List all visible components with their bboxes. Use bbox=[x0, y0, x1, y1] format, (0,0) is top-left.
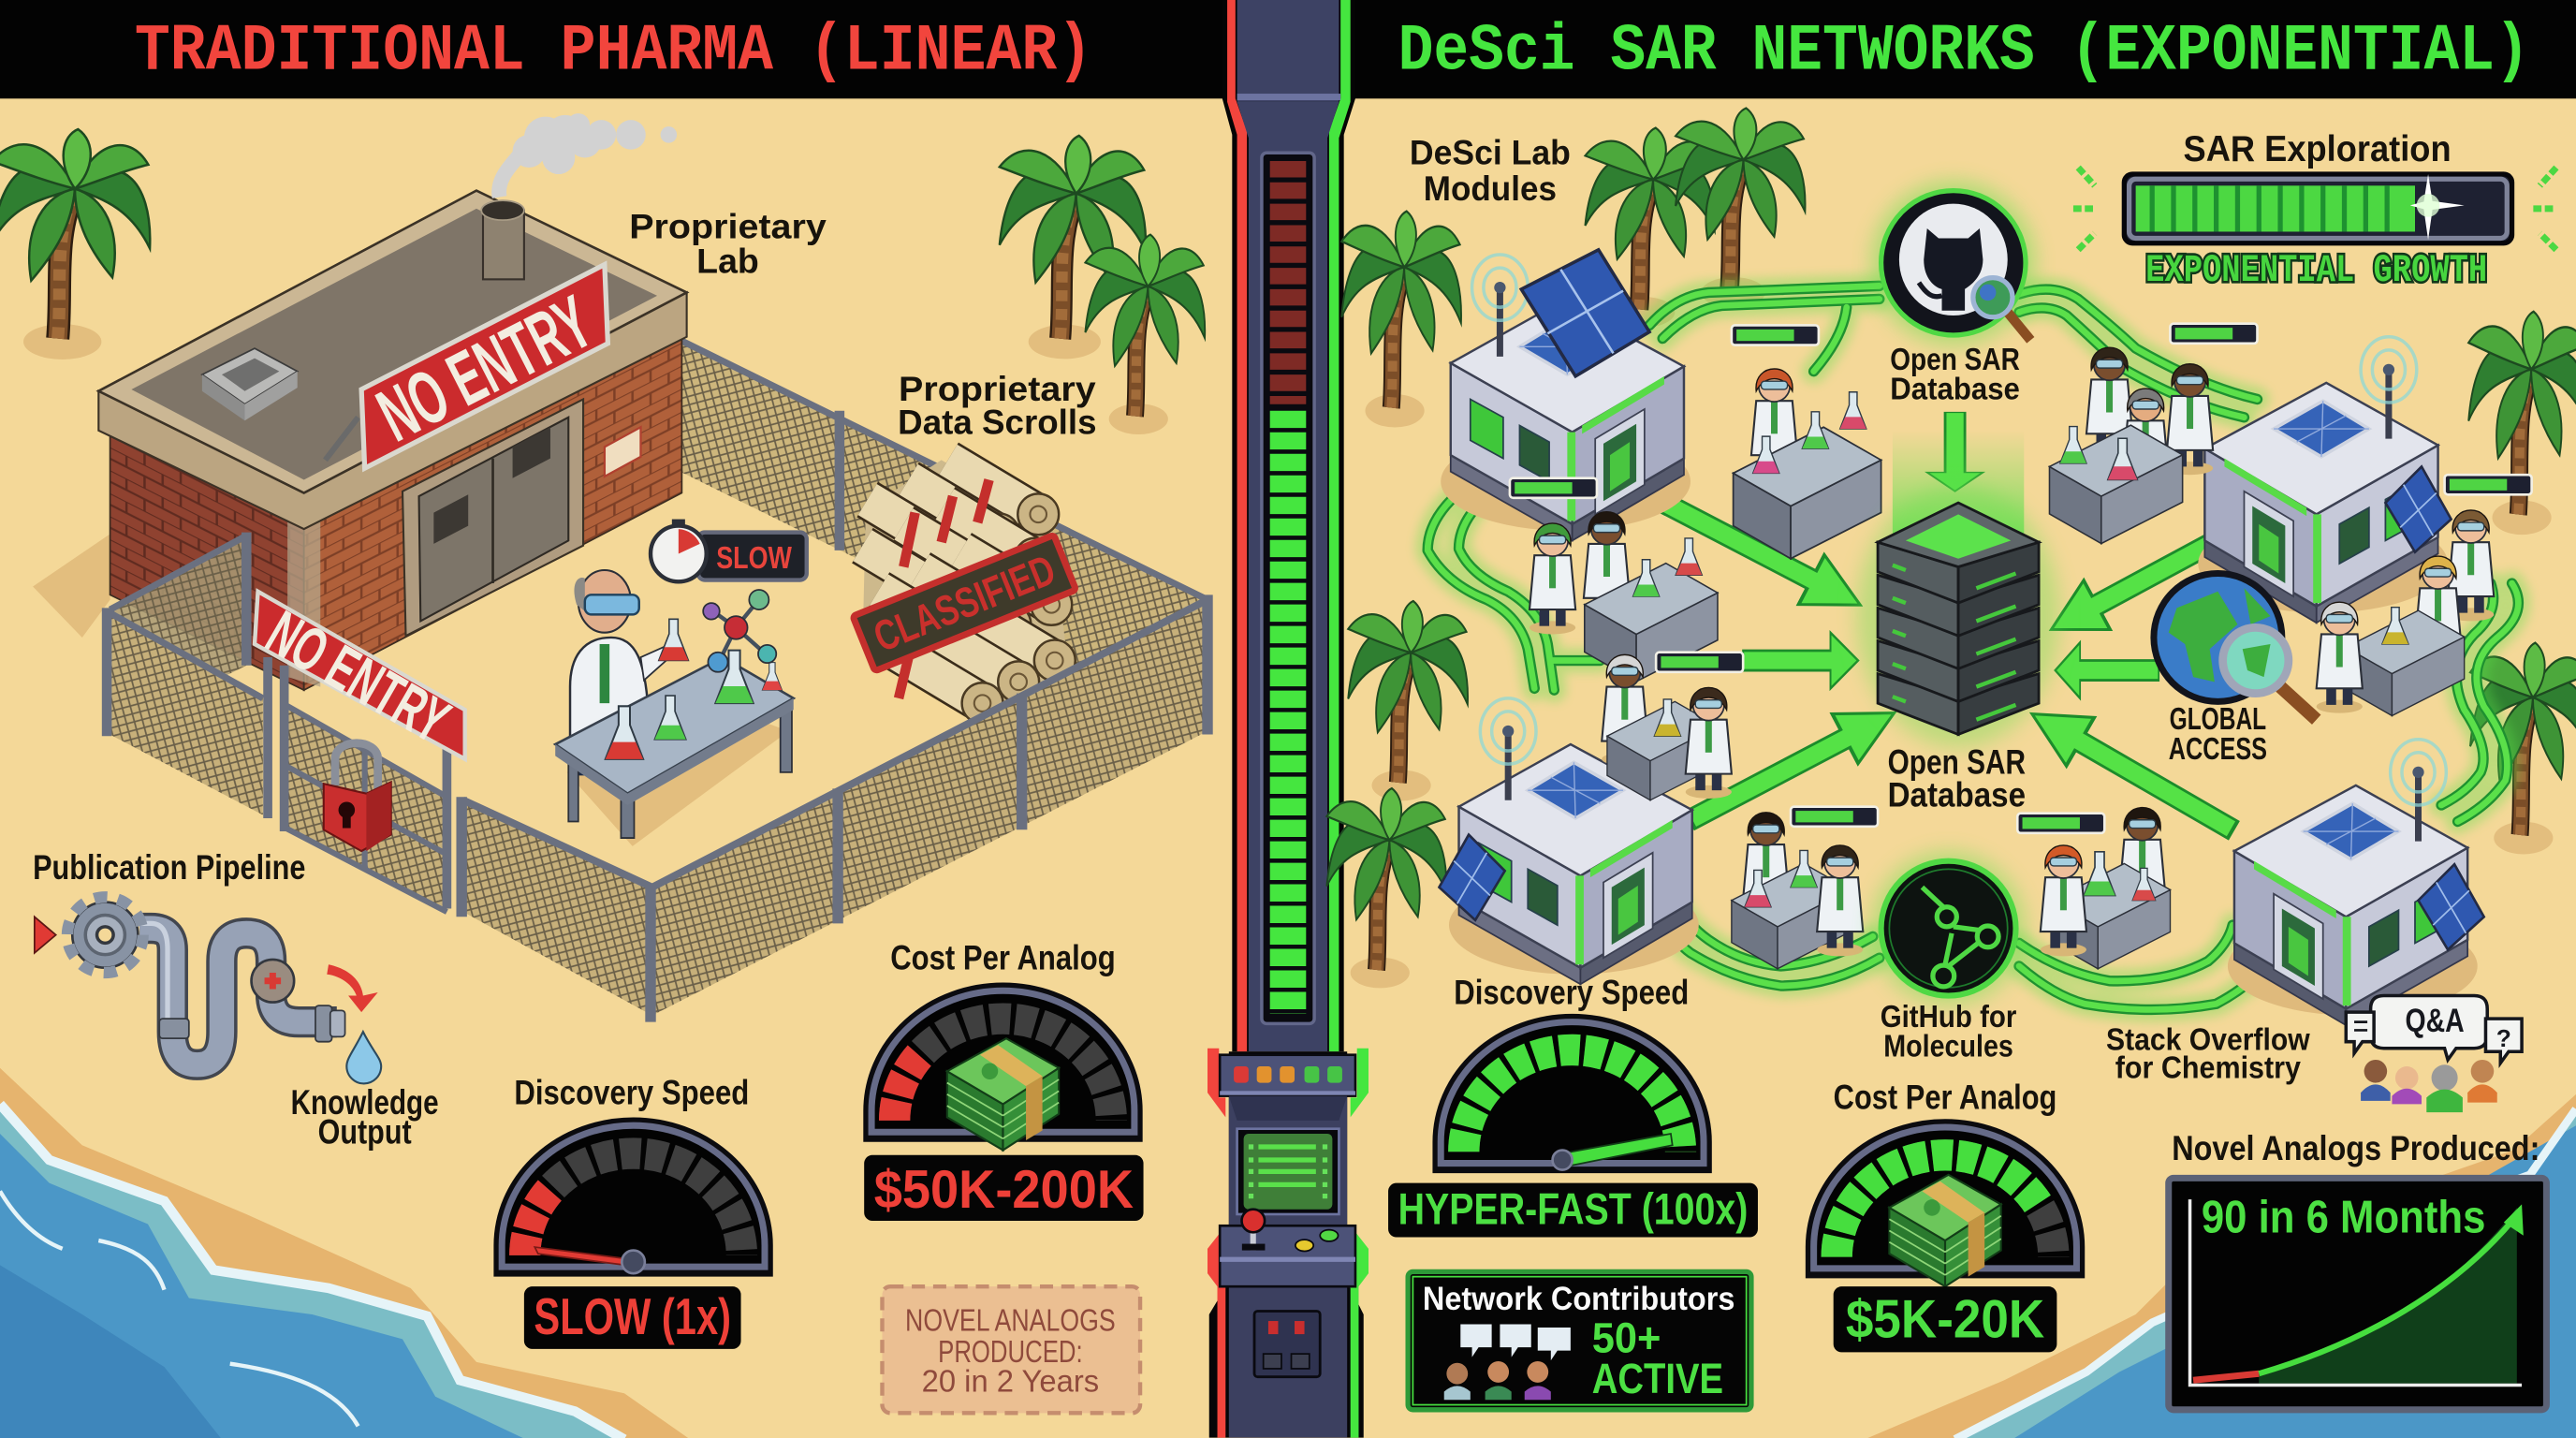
axes bbox=[2190, 1199, 2522, 1385]
stat box: novel analogs left bbox=[882, 1286, 1140, 1413]
pipeline bbox=[35, 897, 345, 1064]
wall notice bbox=[605, 427, 640, 477]
scientist group: lower left bbox=[1602, 654, 1732, 800]
scientist bbox=[570, 570, 674, 775]
chat bubbles bbox=[1460, 1325, 1571, 1360]
label: proprietary lab: Proprietary bbox=[629, 207, 827, 245]
panel: network contributors: ACTIVE bbox=[1592, 1355, 1723, 1402]
label: stack overflow for chemistry: for Chemistry bbox=[2115, 1050, 2301, 1085]
ac unit bbox=[202, 348, 298, 420]
badge: slow 1x: SLOW (1x) bbox=[534, 1288, 731, 1345]
icon: water drop bbox=[346, 1032, 381, 1083]
network traces bbox=[1427, 286, 2518, 1009]
label: proprietary lab bbox=[629, 207, 827, 280]
led meter bbox=[1262, 153, 1314, 1023]
palm trees: right scene bbox=[1326, 108, 2576, 988]
rays bbox=[2073, 168, 2556, 250]
label: exponential growth: EXPONENTIAL GROWTH bbox=[2145, 248, 2487, 293]
label: open sar database top: Database bbox=[1890, 372, 2020, 406]
scientist group: bottom left bbox=[1732, 813, 1863, 969]
classified stamp: CLASSIFIED bbox=[867, 546, 1061, 661]
classified stamp bbox=[853, 535, 1076, 671]
scientist group: left middle bbox=[1530, 512, 1718, 682]
magnifier bbox=[1973, 278, 2030, 340]
label: open sar database bottom: Open SAR bbox=[1888, 743, 2026, 782]
label: desci lab modules bbox=[1410, 134, 1571, 208]
label: proprietary data scrolls: Data Scrolls bbox=[898, 403, 1097, 441]
label: knowledge output bbox=[291, 1083, 439, 1151]
label: sar exploration: SAR Exploration bbox=[2184, 129, 2452, 169]
gate no entry sign: NO ENTRY bbox=[256, 598, 461, 756]
roof no entry sign bbox=[326, 265, 607, 468]
scrolls pile bbox=[853, 460, 1076, 724]
q&a speech bubbles bbox=[2346, 996, 2522, 1112]
arrow: github to database bbox=[1927, 413, 1983, 492]
label: discovery speed left: Discovery Speed bbox=[514, 1073, 749, 1111]
slow timer badge: SLOW bbox=[716, 541, 792, 576]
lights bbox=[1234, 1066, 1342, 1083]
stat box: novel analogs left: NOVEL ANALOGS bbox=[905, 1304, 1116, 1339]
center column with led meter bbox=[1222, 0, 1355, 1051]
label: proprietary lab: Lab bbox=[696, 242, 759, 280]
slow timer badge bbox=[651, 520, 807, 581]
stat box: novel analogs left: 20 in 2 Years bbox=[922, 1365, 1099, 1400]
lab table with scientist bbox=[555, 570, 794, 846]
chart: 90 in 6 months bbox=[2169, 1178, 2546, 1410]
fence: front panels bbox=[461, 594, 1208, 1022]
sar exploration progress bar bbox=[2073, 168, 2556, 250]
smoke bbox=[499, 113, 677, 198]
q&a speech bubbles: ? bbox=[2496, 1024, 2511, 1052]
area under curve bbox=[2259, 1208, 2517, 1384]
linear segment bbox=[2193, 1373, 2259, 1380]
scientist group: right bbox=[2317, 510, 2494, 715]
label: stack overflow for chemistry: Stack Overflow bbox=[2106, 1022, 2310, 1057]
title: traditional pharma: TRADITIONAL PHARMA (LINEAR) bbox=[135, 16, 1092, 90]
palm trees: left scene bbox=[0, 129, 1205, 434]
badge: hyper-fast: HYPER-FAST (100x) bbox=[1398, 1184, 1748, 1234]
sparkle bbox=[2410, 174, 2465, 240]
label: knowledge output: Knowledge bbox=[291, 1083, 439, 1122]
gauge: cost per analog right bbox=[1810, 1123, 2080, 1286]
progress mini bars bbox=[1510, 324, 2532, 833]
label: publication pipeline: Publication Pipeline bbox=[33, 848, 305, 887]
icon: github octocat circle bbox=[1871, 181, 2036, 345]
coin door bbox=[1254, 1312, 1320, 1377]
building: proprietary lab bbox=[33, 113, 687, 690]
ocean: bottom left bbox=[0, 1068, 690, 1438]
locked gate bbox=[255, 592, 465, 912]
label: github for molecules: GitHub for bbox=[1881, 1000, 2016, 1034]
brick walls bbox=[110, 431, 304, 690]
chimney bbox=[481, 200, 524, 279]
fence: back panel bbox=[677, 339, 1208, 731]
label: cost per analog right: Cost Per Analog bbox=[1834, 1078, 2056, 1117]
label: open sar database bottom bbox=[1888, 743, 2026, 814]
label: stack overflow for chemistry bbox=[2106, 1022, 2310, 1085]
gate no entry sign bbox=[255, 592, 465, 759]
gauge: cost per analog left bbox=[869, 988, 1137, 1151]
q&a speech bubbles: Q&A bbox=[2405, 1003, 2465, 1039]
label: proprietary data scrolls: Proprietary bbox=[899, 370, 1096, 408]
badge: 5k-20k: $5K-20K bbox=[1846, 1290, 2044, 1350]
icon: red flow arrow bbox=[327, 964, 378, 1012]
stat box: novel analogs left: PRODUCED: bbox=[938, 1335, 1083, 1370]
gear bbox=[67, 897, 143, 973]
panel: network contributors: Network Contributors bbox=[1423, 1281, 1734, 1317]
joystick bbox=[1242, 1210, 1265, 1251]
open sar database server stack bbox=[1856, 431, 2060, 748]
valve bbox=[252, 960, 294, 1003]
label: open sar database top: Open SAR bbox=[1890, 343, 2020, 377]
scientist group: top right bbox=[2049, 347, 2213, 544]
chart: 90 in 6 months: 90 in 6 Months bbox=[2202, 1192, 2485, 1242]
contributor avatars bbox=[1444, 1361, 1551, 1400]
roof parapet bbox=[98, 292, 687, 529]
exponential curve bbox=[2259, 1219, 2513, 1373]
label: github for molecules bbox=[1881, 1000, 2016, 1064]
label: global access bbox=[2169, 702, 2267, 767]
table bbox=[568, 703, 792, 838]
header bar bbox=[0, 0, 2576, 98]
arcade cabinet bbox=[1208, 1049, 1368, 1438]
arcade screen bbox=[1237, 1129, 1339, 1214]
steel door bbox=[402, 399, 583, 636]
lab modules bbox=[1439, 250, 2484, 1025]
badge: 50k-200k: $50K-200K bbox=[874, 1160, 1134, 1220]
label: cost per analog left: Cost Per Analog bbox=[890, 938, 1116, 976]
label: discovery speed right: Discovery Speed bbox=[1454, 973, 1689, 1011]
label: desci lab modules: DeSci Lab bbox=[1410, 134, 1571, 172]
scientist group: top left bbox=[1734, 369, 1881, 559]
label: knowledge output: Output bbox=[318, 1112, 412, 1151]
solar panel: top left module bbox=[1521, 250, 1649, 376]
panel: network contributors: 50+ bbox=[1592, 1313, 1661, 1361]
molecule bbox=[703, 590, 776, 672]
q&a people bbox=[2361, 1060, 2497, 1112]
table shadow bbox=[567, 707, 788, 846]
label: global access: ACCESS bbox=[2169, 732, 2267, 767]
gauge: discovery speed left bbox=[499, 1123, 768, 1273]
label: desci lab modules: Modules bbox=[1424, 169, 1557, 208]
roof no entry sign: NO ENTRY bbox=[365, 280, 606, 458]
label: global access: GLOBAL bbox=[2170, 702, 2266, 737]
padlock bbox=[324, 743, 391, 851]
label: open sar database bottom: Database bbox=[1888, 776, 2026, 814]
label: proprietary data scrolls bbox=[898, 370, 1097, 441]
label: github for molecules: Molecules bbox=[1883, 1029, 2013, 1064]
flasks bbox=[606, 706, 643, 759]
panel: network contributors bbox=[1408, 1271, 1751, 1410]
input arrow bbox=[35, 917, 56, 953]
fence: left panels bbox=[107, 533, 263, 814]
flow arrows to database bbox=[1645, 475, 2254, 854]
side solar panels bbox=[1439, 466, 2484, 949]
ocean: bottom right bbox=[1865, 1094, 2576, 1438]
label: open sar database top bbox=[1890, 343, 2020, 406]
gauge: discovery speed right bbox=[1438, 1019, 1707, 1170]
icon: globe with magnifier bbox=[2150, 570, 2317, 720]
icon: github for molecules bbox=[1871, 851, 2026, 1005]
scientist group: bottom right bbox=[2041, 808, 2170, 969]
